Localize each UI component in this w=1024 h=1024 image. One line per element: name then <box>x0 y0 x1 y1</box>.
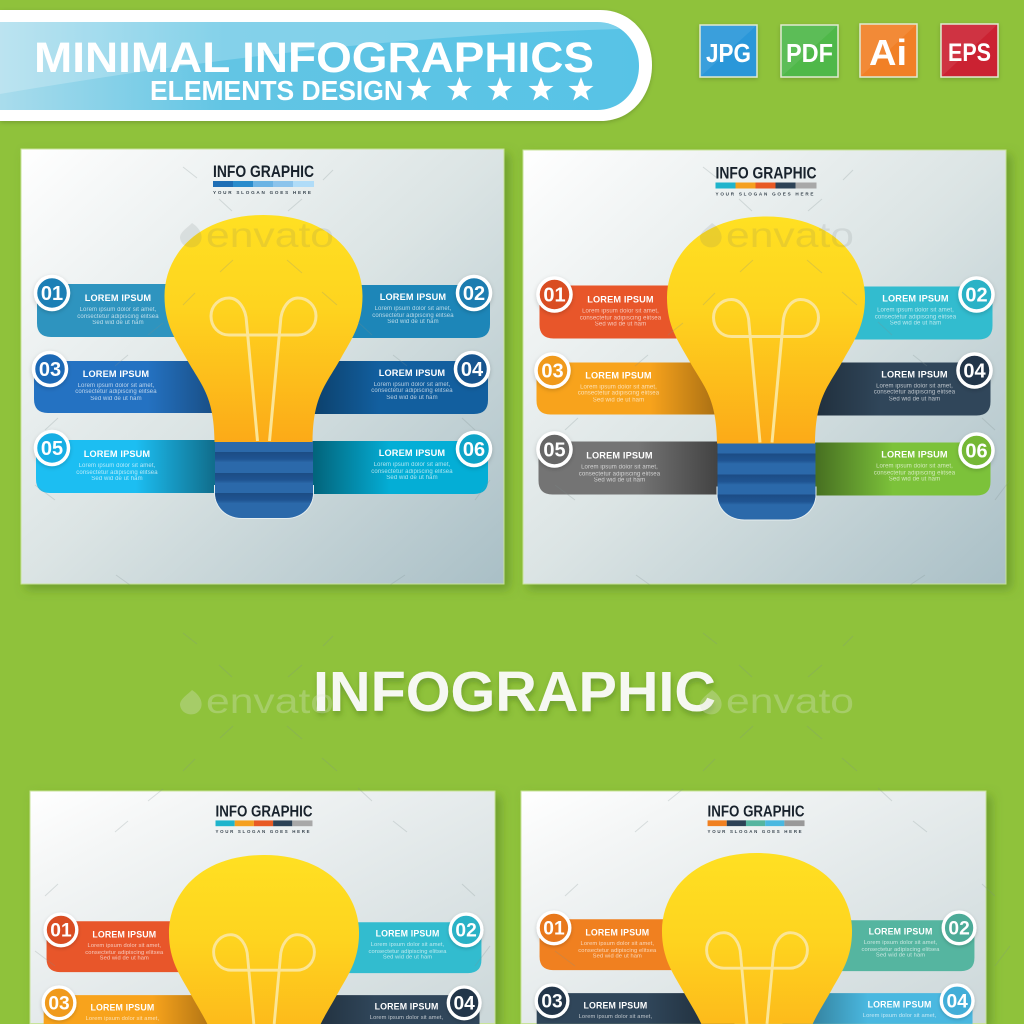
option 02: Sed wid de ut ham <box>890 320 941 326</box>
watermark: top left <box>180 216 334 255</box>
option 02: Sed wid de ut ham <box>387 319 439 325</box>
panel title: INFO GRAPHIC <box>216 804 312 821</box>
option 02: LOREM IPSUM <box>380 292 446 302</box>
icon: PDF format: PDF <box>786 38 833 68</box>
panel title <box>216 804 312 834</box>
watermark: top right <box>700 216 854 255</box>
option 01: consectetur adipiscing elitsea <box>580 316 662 322</box>
option 04: Lorem ipsum dolor sit amet, <box>863 1013 937 1019</box>
option 03: Lorem ipsum dolor sit amet, <box>86 1016 159 1022</box>
panel title: YOUR SLOGAN GOES HERE <box>716 192 814 196</box>
watermark: top left: envato <box>206 216 334 255</box>
option 02: Lorem ipsum dolor sit amet, <box>864 940 938 946</box>
option 05: LOREM IPSUM <box>586 450 653 460</box>
option 04: Lorem ipsum dolor sit amet, <box>370 1015 444 1021</box>
icon: EPS format: EPS <box>948 39 991 67</box>
option 01: Sed wid de ut ham <box>595 322 646 328</box>
option 01: consectetur adipiscing elitsea <box>85 950 164 956</box>
icon: light bulb <box>164 215 362 519</box>
option 02: LOREM IPSUM <box>882 294 949 304</box>
panel title <box>716 164 817 196</box>
option 02: 02 <box>965 284 988 306</box>
panel title: INFO GRAPHIC <box>716 164 817 182</box>
option 05: LOREM IPSUM <box>84 449 150 459</box>
watermark: top right: envato <box>726 216 854 255</box>
option 04: 04 <box>963 360 986 382</box>
option 01: 01 <box>543 919 565 940</box>
option 02 <box>330 276 490 338</box>
option 03: 03 <box>541 360 564 382</box>
option 04: LOREM IPSUM <box>375 1002 438 1012</box>
icon: PDF format <box>781 25 838 77</box>
option 01: Sed wid de ut ham <box>100 956 149 962</box>
banner subtitle: ELEMENTS DESIGN <box>150 75 403 106</box>
option 04: Sed wid de ut ham <box>386 395 438 401</box>
option 02: LOREM IPSUM <box>869 927 932 937</box>
option 05: consectetur adipiscing elitsea <box>76 470 158 476</box>
panel title <box>213 163 314 195</box>
option 06: Lorem ipsum dolor sit amet, <box>876 464 953 470</box>
option 04: 04 <box>453 994 475 1015</box>
option 06 <box>814 434 993 496</box>
option 03: LOREM IPSUM <box>83 369 149 379</box>
option 03: consectetur adipiscing elitsea <box>75 389 157 395</box>
option 01: consectetur adipiscing elitsea <box>77 314 159 320</box>
option 04: 04 <box>461 359 484 381</box>
panel: multicolour bulb infographic <box>523 150 1006 584</box>
option 05: Sed wid de ut ham <box>594 478 645 484</box>
option 03: LOREM IPSUM <box>585 370 652 380</box>
option 03: Lorem ipsum dolor sit amet, <box>579 1014 652 1020</box>
option 05: Lorem ipsum dolor sit amet, <box>581 464 658 470</box>
option 02: Sed wid de ut ham <box>383 955 432 961</box>
option 03: 03 <box>541 992 563 1013</box>
option 01 <box>538 278 702 338</box>
rating stars <box>406 77 594 100</box>
option 03: 03 <box>48 994 70 1015</box>
option 04 <box>290 352 488 414</box>
option 01: 01 <box>41 283 63 305</box>
option 01: 01 <box>50 921 72 942</box>
option 02 <box>328 914 482 973</box>
icon: EPS format <box>941 24 998 77</box>
option 03: LOREM IPSUM <box>90 1003 154 1013</box>
option 06 <box>311 432 490 494</box>
icon: JPG format <box>700 25 757 77</box>
banner title: MINIMAL INFOGRAPHICS <box>34 34 594 82</box>
option 03 <box>43 987 241 1024</box>
panel title <box>708 804 805 834</box>
option 01: LOREM IPSUM <box>585 928 649 938</box>
option 01: 01 <box>543 284 566 306</box>
heading: infographic: INFOGRAPHIC <box>313 660 716 724</box>
option 02: 02 <box>948 919 970 940</box>
option 06: consectetur adipiscing elitsea <box>874 470 956 476</box>
option 03 <box>34 352 240 413</box>
option 06: Lorem ipsum dolor sit amet, <box>374 462 451 468</box>
option 03: 03 <box>39 359 61 381</box>
option 05: 05 <box>543 440 566 462</box>
option 01 <box>36 276 200 337</box>
option 04: LOREM IPSUM <box>379 368 445 378</box>
option 03: LOREM IPSUM <box>583 1001 647 1011</box>
option 01: consectetur adipiscing elitsea <box>578 948 657 954</box>
option 01 <box>45 914 203 972</box>
option 06: Sed wid de ut ham <box>386 475 438 481</box>
option 02: LOREM IPSUM <box>376 929 439 939</box>
panel title: INFO GRAPHIC <box>213 163 314 181</box>
option 04: consectetur adipiscing elitsea <box>874 390 956 396</box>
panel title: YOUR SLOGAN GOES HERE <box>216 829 310 834</box>
option 01: LOREM IPSUM <box>92 930 156 940</box>
option 06: LOREM IPSUM <box>379 448 445 458</box>
watermark: middle right: envato <box>726 682 854 721</box>
option 03 <box>536 985 734 1024</box>
icon: Ai format <box>860 24 917 77</box>
option 02 <box>821 912 975 971</box>
icon: Ai format: Ai <box>869 32 907 73</box>
icon: light bulb <box>667 216 865 520</box>
option 06: LOREM IPSUM <box>881 450 948 460</box>
watermark: middle left <box>180 682 334 721</box>
option 06: Sed wid de ut ham <box>889 476 940 482</box>
panel: lower left bulb infographic <box>30 791 495 1024</box>
option 02: Lorem ipsum dolor sit amet, <box>371 942 445 948</box>
panel: lower right bulb infographic <box>521 791 986 1024</box>
option 04 <box>782 985 973 1024</box>
option 05: consectetur adipiscing elitsea <box>579 472 661 478</box>
option 03 <box>536 354 742 414</box>
option 05: Sed wid de ut ham <box>91 476 143 482</box>
option 03: Sed wid de ut ham <box>90 396 142 402</box>
option 02: 02 <box>463 283 485 305</box>
option 03: Lorem ipsum dolor sit amet, <box>78 383 155 389</box>
icon: light bulb <box>169 855 359 1024</box>
option 06: consectetur adipiscing elitsea <box>371 469 453 475</box>
watermark: middle right <box>700 682 854 721</box>
option 06: 06 <box>463 439 485 461</box>
watermark: middle left: envato <box>206 682 334 721</box>
option 03: consectetur adipiscing elitsea <box>578 390 660 396</box>
option 05 <box>36 432 217 493</box>
option 05: Lorem ipsum dolor sit amet, <box>79 463 156 469</box>
option 04: LOREM IPSUM <box>881 370 948 380</box>
panel: blue bulb infographic <box>21 149 504 584</box>
panel title: INFO GRAPHIC <box>708 804 805 821</box>
option 06: 06 <box>965 440 988 462</box>
icon: JPG format: JPG <box>706 38 751 68</box>
option 01: LOREM IPSUM <box>85 293 151 303</box>
option 01: Lorem ipsum dolor sit amet, <box>88 943 161 949</box>
option 05: 05 <box>41 438 63 460</box>
banner <box>0 10 652 121</box>
option 02: consectetur adipiscing elitsea <box>875 314 957 320</box>
option 01: Lorem ipsum dolor sit amet, <box>582 308 659 314</box>
option 02 <box>832 278 993 340</box>
option 01: Sed wid de ut ham <box>593 954 642 960</box>
option 01: LOREM IPSUM <box>587 294 654 304</box>
option 02: Lorem ipsum dolor sit amet, <box>375 306 452 312</box>
option 01: Sed wid de ut ham <box>92 320 144 326</box>
option 01: Lorem ipsum dolor sit amet, <box>80 307 157 313</box>
panel title: YOUR SLOGAN GOES HERE <box>213 190 311 195</box>
option 04: Lorem ipsum dolor sit amet, <box>876 384 953 390</box>
option 04 <box>792 354 991 416</box>
option 01 <box>538 912 696 970</box>
option 01: Lorem ipsum dolor sit amet, <box>581 941 654 947</box>
option 04: consectetur adipiscing elitsea <box>371 388 453 394</box>
option 02: Sed wid de ut ham <box>876 953 925 959</box>
option 04 <box>289 987 480 1024</box>
option 04: Sed wid de ut ham <box>889 396 940 402</box>
option 03: Lorem ipsum dolor sit amet, <box>580 384 657 390</box>
option 03: Sed wid de ut ham <box>593 398 644 404</box>
icon: light bulb <box>662 853 852 1024</box>
option 04: 04 <box>946 992 968 1013</box>
option 04: Lorem ipsum dolor sit amet, <box>374 382 451 388</box>
option 02: consectetur adipiscing elitsea <box>369 949 447 955</box>
panel title: YOUR SLOGAN GOES HERE <box>708 829 802 834</box>
option 05 <box>538 433 720 494</box>
option 04: LOREM IPSUM <box>868 1000 931 1010</box>
option 02: 02 <box>455 921 477 942</box>
option 02: Lorem ipsum dolor sit amet, <box>877 308 954 314</box>
option 02: consectetur adipiscing elitsea <box>372 313 454 319</box>
option 02: consectetur adipiscing elitsea <box>862 947 940 953</box>
